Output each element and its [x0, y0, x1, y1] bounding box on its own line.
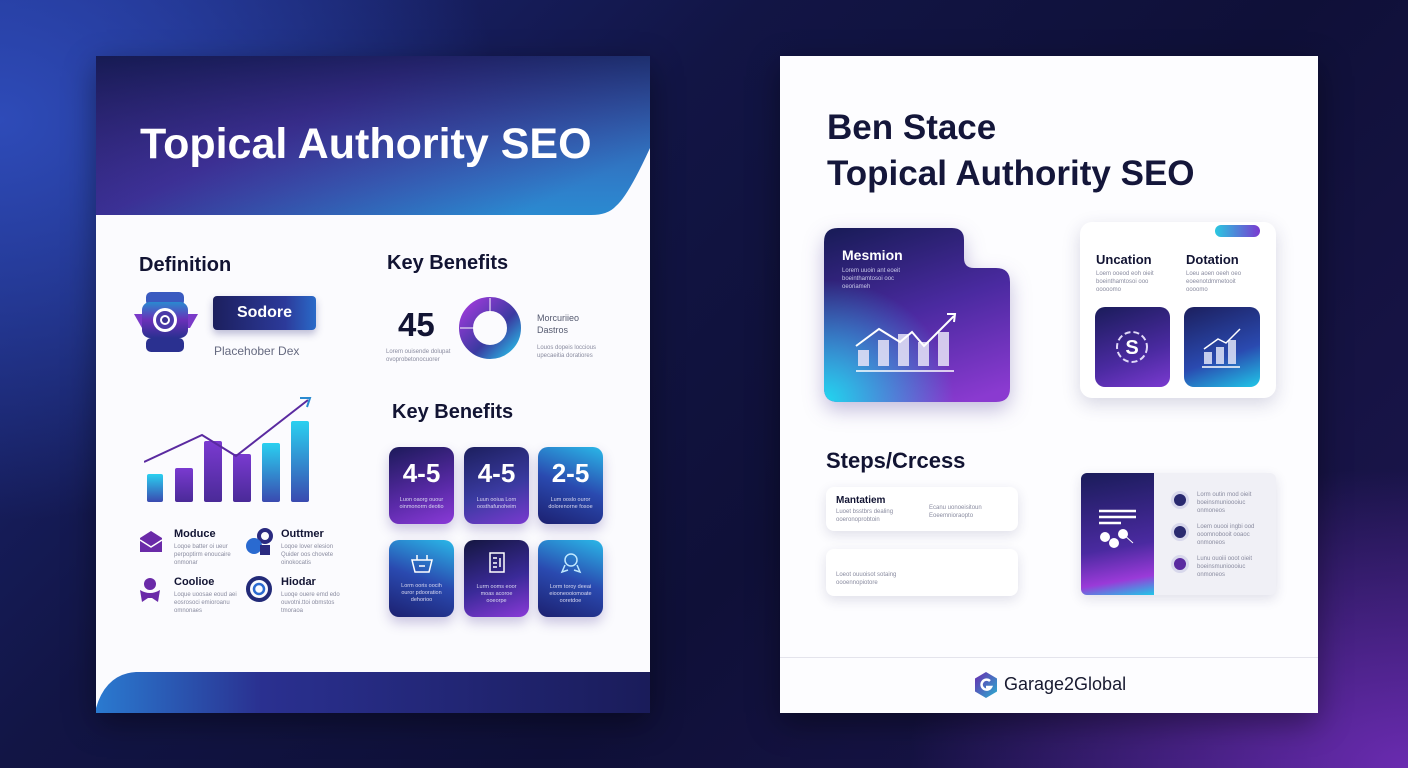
- item: Moduce: [140, 528, 231, 566]
- panel: left card: Lorem ouisende dolupat: [386, 349, 450, 355]
- icon tile: dollar: [1095, 307, 1170, 387]
- stat: 45: 45: [398, 306, 435, 343]
- item: Moduce: Loqoe batter oi ueur: [174, 544, 228, 550]
- heading: Key Benefits 2: Key Benefits: [392, 401, 513, 423]
- title: Ben Stace: [827, 108, 996, 147]
- list panel: Loem ouooi ingbi ood: [1197, 524, 1254, 530]
- item: Hiodar: Luoqe ouere emd edo: [281, 592, 340, 598]
- icon tile: dollar: S: [1125, 337, 1139, 359]
- item: Coolioe: [140, 576, 237, 614]
- step card 1: Mantatiem: [836, 495, 885, 506]
- tile grid: oinmonorm deotio: [399, 504, 444, 510]
- item: Hiodar: ouvotni.ttoi obmstos: [281, 600, 334, 606]
- list panel: [1081, 473, 1276, 595]
- step card 2: Loeot ouuoisot sotaing: [836, 572, 896, 578]
- logo: Garage2Global: [975, 672, 1126, 698]
- callout panel: eoeenotdmmetooit: [1186, 279, 1236, 285]
- title: [827, 108, 1195, 193]
- tile grid: ooretdoe: [560, 598, 581, 604]
- tile grid: Luon oaorg ouour: [400, 497, 443, 503]
- list panel: Lunu ouoiii ooot oieit: [1197, 556, 1252, 562]
- tile grid: eiooneooiomoate: [549, 591, 592, 597]
- item: Moduce: perpoptirm enoucaire: [174, 552, 231, 558]
- list panel: ooomnobooit ooaoc: [1197, 532, 1250, 538]
- item: Coolioe: Coolioe: [174, 576, 214, 588]
- panel: left card: Louos dopeis loccious: [537, 345, 596, 351]
- tile grid: Lorm toroy deeai: [550, 584, 591, 590]
- text: placeholder: Placehober Dex: [214, 344, 299, 358]
- list panel: boeinsmunioooiuc: [1197, 500, 1245, 506]
- title: Topical Authority SEO: [140, 120, 592, 168]
- tile grid: Lurm ooms eoor: [476, 584, 517, 590]
- card: Mesmion: oeoriameh: [842, 284, 870, 290]
- step card 2: oooennopiotore: [836, 580, 878, 586]
- tile grid: 4-5: [403, 458, 440, 488]
- step card 1: ooeronoprobtoin: [836, 517, 880, 523]
- icon: definition emblem: [134, 292, 198, 352]
- donut legend: Dastros: [537, 325, 568, 335]
- tile grid: dolorenorne fosoe: [548, 504, 593, 510]
- button: Sodore: Sodore: [237, 304, 292, 321]
- card: Mesmion: [813, 225, 1021, 421]
- step card 1: Luoet bsstbrs dealing: [836, 509, 893, 515]
- item: Moduce: Moduce: [174, 528, 216, 540]
- list panel: boeinsmunioooiuc: [1197, 564, 1245, 570]
- header band: [96, 56, 650, 215]
- item: Coolioe: Loque uoosae eoud aei: [174, 592, 237, 598]
- callout panel: oooomo: [1186, 287, 1208, 293]
- icon tile: chart: [1184, 307, 1260, 387]
- button: Sodore: [213, 296, 316, 330]
- item: Coolioe: eosrosoci emioroanu: [174, 600, 230, 606]
- panel: left card: upecaeitia doratiores: [537, 353, 593, 359]
- panel: left card: [96, 56, 650, 713]
- step card 1: Ecanu uonoeisitoun: [929, 505, 982, 511]
- item: Outtmer: oinokocatis: [281, 560, 311, 566]
- callout panel: Dotation: [1186, 252, 1239, 267]
- item: Hiodar: Hiodar: [281, 576, 316, 588]
- callout panel: boeinthamtosoi ooo: [1096, 279, 1148, 285]
- footer divider: [780, 657, 1318, 658]
- card: Mesmion: Lorem uuoin ant eoeit: [842, 268, 900, 274]
- heading: Steps/Crcess: Steps/Crcess: [826, 448, 965, 473]
- icon panel: [1081, 473, 1154, 595]
- callout panel: ooooomo: [1096, 287, 1121, 293]
- list panel: onmoneos: [1197, 572, 1225, 578]
- step card 1: [826, 487, 1018, 531]
- footer band: [96, 672, 650, 713]
- step card 2: [826, 549, 1018, 596]
- tile grid: Lum ooslo ouror: [551, 497, 590, 503]
- donut legend: [537, 313, 579, 335]
- card: Mesmion: Mesmion: [842, 247, 903, 263]
- item: Moduce: onmonar: [174, 560, 198, 566]
- item: Coolioe: omnonaes: [174, 608, 202, 614]
- tile grid: ooeorpe: [486, 598, 507, 604]
- donut chart: [459, 297, 521, 359]
- card: Mesmion: boeinthamtosoi ooc: [842, 276, 894, 282]
- bar chart: [144, 397, 312, 502]
- tile grid: moas acoroe: [481, 591, 512, 597]
- item: Outtmer: Quider oos chovete: [281, 552, 333, 558]
- step card 1: Eoeemnioraopto: [929, 513, 973, 519]
- callout panel: [1080, 222, 1276, 398]
- tile grid: oosthafunoheim: [477, 504, 516, 510]
- heading: Definition: Definition: [139, 254, 231, 276]
- item: Outtmer: Loqoe lover elesion: [281, 544, 333, 550]
- item: Outtmer: [246, 528, 333, 566]
- title: Topical Authority SEO: [827, 154, 1195, 193]
- list panel: onmoneos: [1197, 508, 1225, 514]
- item: Outtmer: Outtmer: [281, 528, 324, 540]
- logo: Garage2Global: Garage2Global: [1004, 674, 1126, 694]
- callout panel: Loem ooeod eoh oieit: [1096, 271, 1154, 277]
- heading: Key Benefits 1: Key Benefits: [387, 252, 508, 274]
- tile grid: Luun ooiua Lorn: [477, 497, 516, 503]
- tile grid: [383, 447, 609, 629]
- item: Hiodar: [246, 576, 340, 614]
- callout panel: Uncation: [1096, 252, 1152, 267]
- list panel: Lorm outin mod oieit: [1197, 492, 1251, 498]
- tile grid: ouror pdooration: [401, 590, 442, 596]
- tile grid: 4-5: [478, 458, 515, 488]
- donut legend: Morcuriieo: [537, 313, 579, 323]
- panel: left card: ovoprobetonocuorer: [386, 357, 440, 363]
- list panel: onmoneos: [1197, 540, 1225, 546]
- panel: right card: [780, 56, 1318, 713]
- item: Hiodar: tmoraoa: [281, 608, 303, 614]
- toggle pill: [1215, 225, 1260, 237]
- tile grid: Lorm ooris oocih: [401, 583, 442, 589]
- tile grid: 2-5: [552, 458, 589, 488]
- tile grid: dehorioo: [411, 597, 432, 603]
- callout panel: Loeu aoen oeeh oeo: [1186, 271, 1241, 277]
